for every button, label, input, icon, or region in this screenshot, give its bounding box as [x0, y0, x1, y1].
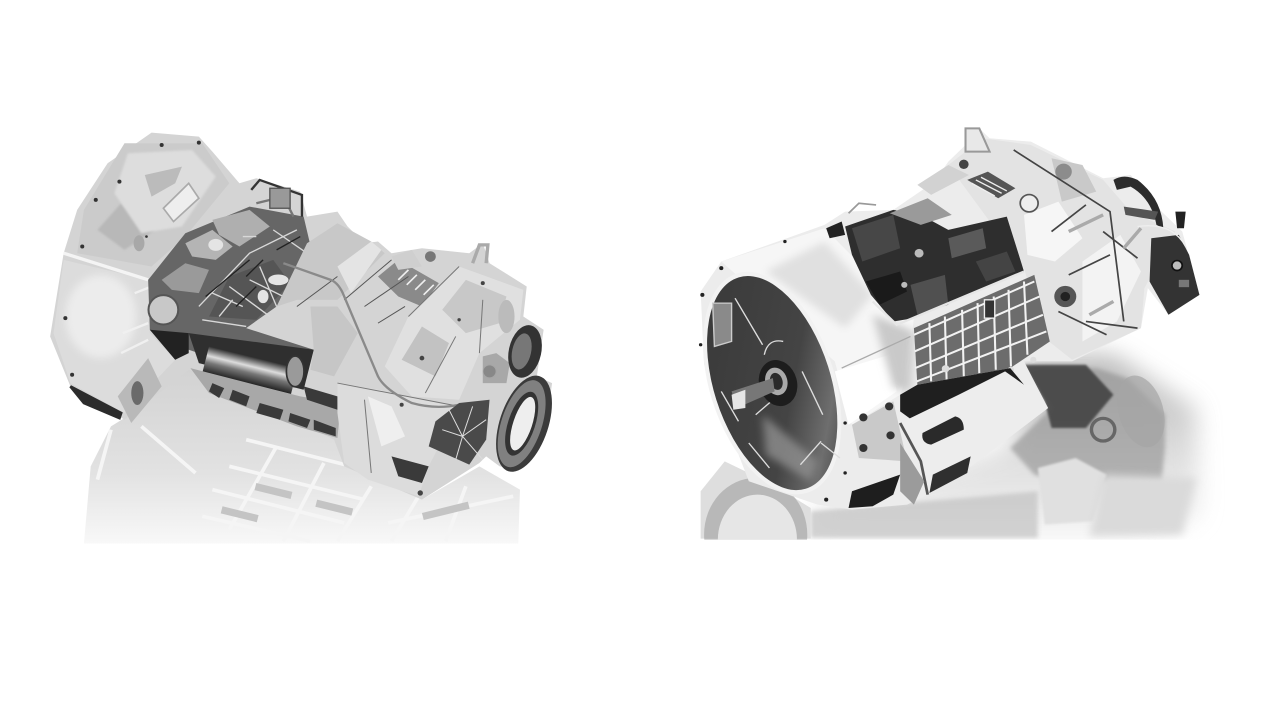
- sensor module: [1138, 212, 1199, 315]
- right end gear: [1113, 177, 1163, 228]
- rear housing: [337, 267, 523, 496]
- gear cluster: [429, 353, 510, 465]
- left silhouette: [50, 133, 552, 500]
- upper bracket: [251, 180, 302, 217]
- lower shadow: [900, 368, 1024, 421]
- right reflection: [701, 355, 1199, 591]
- bell foot bracket: [849, 401, 924, 508]
- output housing ring: [508, 325, 542, 378]
- right gearbox: [698, 127, 1207, 540]
- bell housing face: [705, 276, 840, 490]
- upper mid casing: [277, 223, 488, 376]
- bell housing: [54, 141, 229, 418]
- ribbed casing grid: [914, 275, 1050, 385]
- output flange: [496, 376, 552, 472]
- rear housing: [917, 128, 1175, 360]
- bell housing outer: [699, 228, 914, 502]
- mounting plate: [118, 358, 162, 423]
- control unit: [148, 206, 314, 360]
- left reflection: [84, 368, 520, 544]
- hydraulic cylinder: [189, 333, 314, 394]
- control unit: [826, 198, 1024, 325]
- left gearbox: [50, 133, 563, 544]
- data plate: [967, 172, 1015, 198]
- ribbed casing: [190, 368, 341, 438]
- oil pipe: [283, 263, 459, 407]
- lower shield: [900, 371, 1048, 495]
- right silhouette: [701, 128, 1199, 510]
